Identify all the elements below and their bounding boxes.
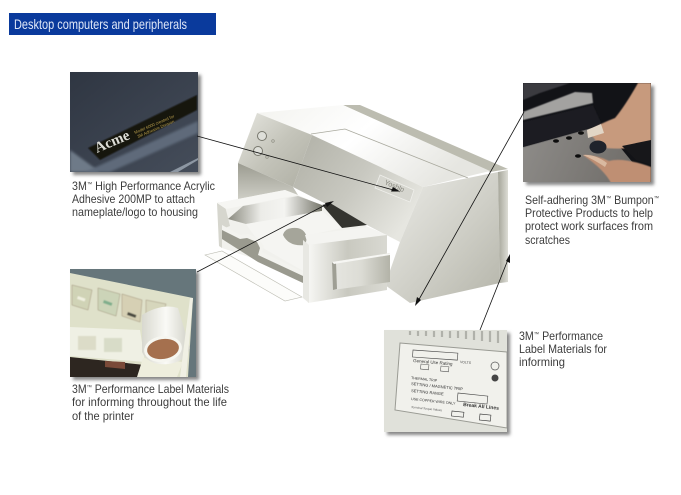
- photo: nameplate: Acme: [92, 128, 133, 157]
- printer illustration: [205, 105, 508, 303]
- photo: rating label: SETTING / MAGNETIC TRIP: [411, 381, 463, 391]
- caption: bumpon: scratches: [525, 233, 570, 247]
- caption: rating label: Performance: [539, 329, 603, 343]
- tray front rim: [305, 227, 387, 245]
- caption: rating label: [519, 329, 607, 369]
- printer front panel: [293, 135, 423, 242]
- caption: nameplate adhesive: ™: [87, 181, 92, 188]
- printer nameplate: [375, 175, 414, 202]
- caption: rating label: ™: [534, 331, 539, 338]
- printer top surface: [257, 105, 490, 187]
- tray scoop: [283, 228, 307, 245]
- arrow: rating label: [480, 254, 510, 330]
- caption: bumpon: ™: [654, 195, 659, 202]
- caption: nameplate adhesive: High Performance Acrylic: [92, 179, 215, 193]
- header bar: Desktop computers and peripherals: [14, 16, 187, 32]
- photo: rating label: SETTING RANGE: [411, 388, 444, 396]
- caption: bumpon: ™: [606, 195, 611, 202]
- caption: label materials: for informing throughout the life: [72, 395, 227, 409]
- caption: bumpon: [525, 193, 659, 247]
- photo: rating label: THERMAL TRIP: [411, 376, 438, 383]
- caption: bumpon: protect work surfaces from: [525, 219, 653, 233]
- caption: rating label: informing: [519, 355, 565, 369]
- photo: nameplate: Model 6000 created for: [133, 113, 176, 135]
- caption: nameplate adhesive: 3M: [72, 179, 89, 193]
- printer right side: [385, 172, 500, 303]
- photo: nameplate: 3M Adhesive Division: [136, 119, 176, 139]
- printer lower left wall: [238, 163, 298, 206]
- printer nameplate: Yoshlp: [383, 179, 405, 194]
- tray dark slit: [322, 203, 367, 228]
- arrow: bumpon: [415, 112, 524, 306]
- lower finger: [583, 155, 651, 185]
- printer right edge: [498, 170, 508, 283]
- tray front face: [308, 235, 387, 303]
- photo: rating label: USE COPPER WIRE ONLY: [411, 397, 456, 406]
- tray base: [217, 190, 387, 303]
- tray left end wall: [217, 202, 230, 248]
- arrow: label roll: [197, 201, 334, 272]
- tray interior floor: [246, 211, 342, 272]
- caption: nameplate adhesive: [72, 179, 215, 219]
- caption: nameplate adhesive: Adhesive 200MP to attach: [72, 192, 195, 206]
- printed instruction panels: [72, 285, 166, 352]
- photo: rating label: Break All Lines: [463, 402, 499, 412]
- caption: bumpon: Bumpon: [611, 193, 654, 207]
- caption: label materials: [72, 382, 229, 423]
- caption: bumpon: Protective Products to help: [525, 206, 653, 220]
- printer control panel: [238, 113, 312, 187]
- photo: rating label: [384, 330, 510, 435]
- paper sheet: [205, 251, 302, 301]
- caption: bumpon: Self-adhering 3M: [525, 193, 616, 207]
- printer back strip: [343, 105, 508, 172]
- tray wave strips: [222, 228, 303, 283]
- arrow: nameplate: [197, 136, 400, 192]
- photo: nameplate: [70, 72, 201, 175]
- paper tray: [217, 190, 390, 303]
- caption: label materials: Performance Label Materials: [92, 382, 229, 396]
- caption: nameplate adhesive: nameplate/logo to housing: [72, 205, 198, 219]
- photo: rating label: Terminal Torque Values: [411, 405, 443, 412]
- photo: label materials roll: [70, 269, 199, 380]
- caption: label materials: 3M: [72, 382, 89, 396]
- caption: rating label: Label Materials for: [519, 342, 607, 356]
- housing vents: [410, 331, 498, 343]
- caption: rating label: 3M: [519, 329, 536, 343]
- tray inner band: [228, 196, 322, 224]
- printer buttons: [254, 132, 274, 158]
- photo: bumpon fingers: [523, 83, 654, 185]
- caption: label materials: ™: [87, 384, 92, 391]
- caption: label materials: of the printer: [72, 409, 134, 423]
- upper fingers: [587, 83, 651, 149]
- photo: rating label: General Use Rating: [413, 358, 453, 366]
- tray back rim: [217, 190, 298, 209]
- tray handle: [332, 253, 390, 290]
- photo: rating label: VOLTS: [460, 360, 472, 365]
- header bar: [9, 13, 216, 35]
